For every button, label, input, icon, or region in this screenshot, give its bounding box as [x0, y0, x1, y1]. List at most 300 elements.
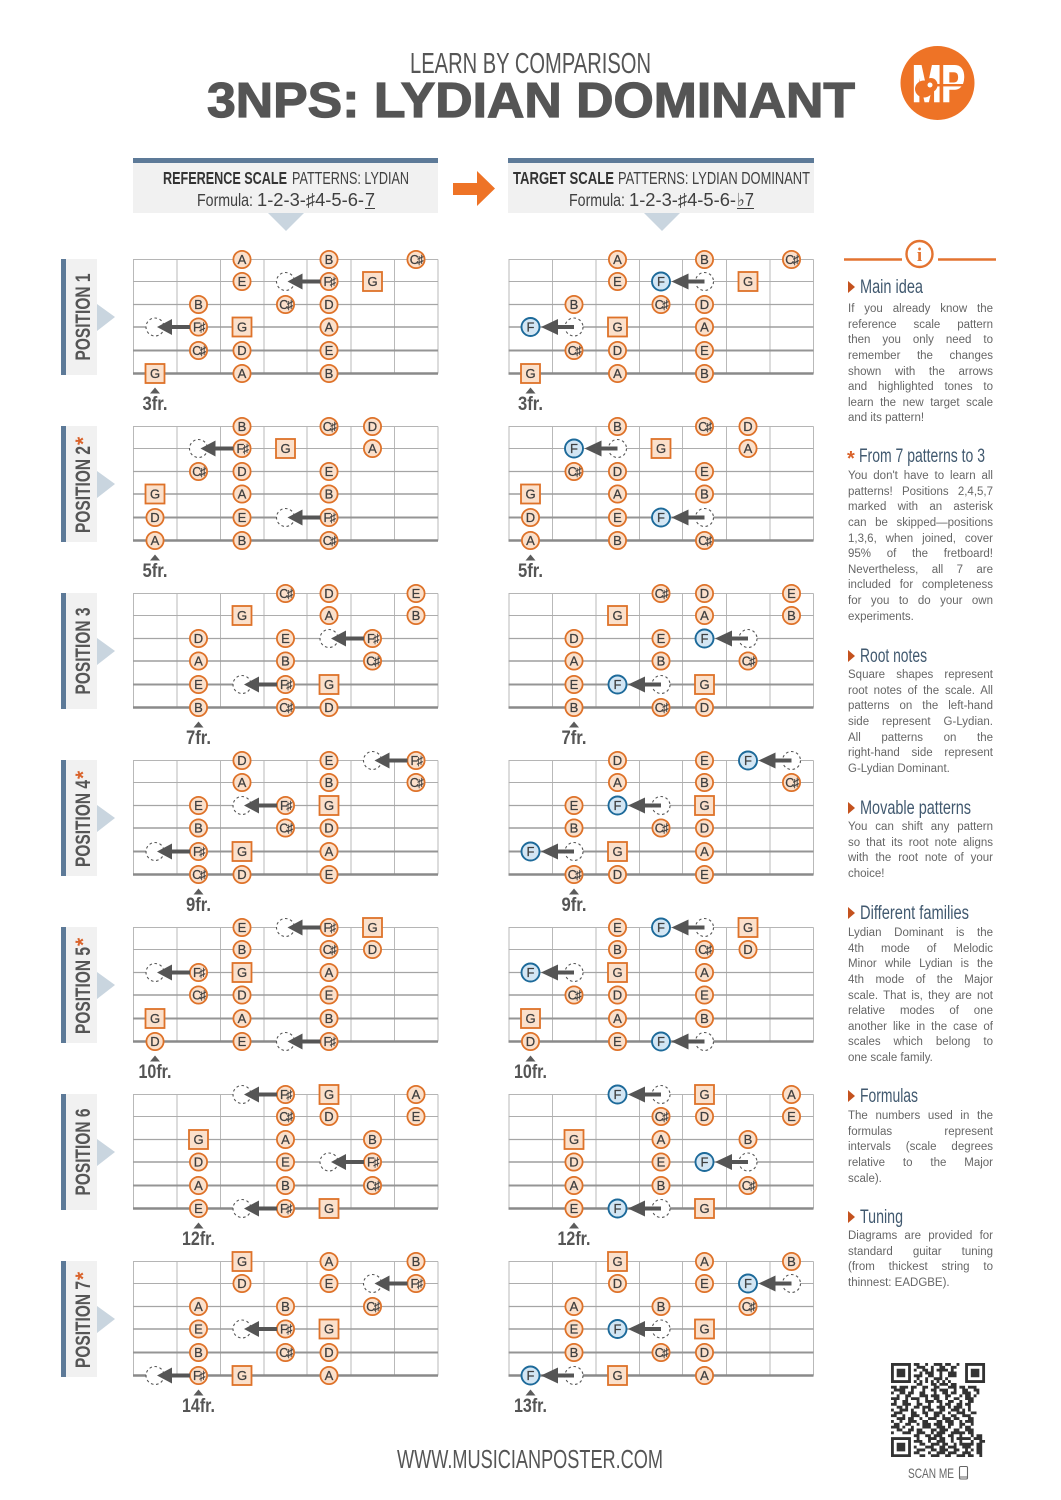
fretboard: position 7 target: C♯ — [655, 1346, 668, 1360]
text: tuning — [848, 1230, 993, 1289]
arrow: F sharp moves to F — [233, 1086, 277, 1104]
position label 7 — [61, 1261, 115, 1377]
fretboard: position 4 reference — [133, 752, 438, 916]
arrow: F sharp moves to F — [276, 272, 320, 290]
subtitle: learn by comparison: LEARN BY COMPARISON — [410, 48, 651, 80]
fretboard: position 5 target: G — [743, 920, 753, 935]
fretboard: position 1 target: B — [700, 252, 709, 267]
heading: movable patterns: Movable patterns — [860, 798, 971, 819]
scan me label with phone icon: SCAN ME — [908, 1465, 954, 1481]
icon: musician poster logo — [900, 46, 974, 120]
heading: formulas: Formulas — [860, 1086, 918, 1107]
fretboard: position 7 target: F — [614, 1322, 622, 1336]
position label 6 — [61, 1094, 115, 1210]
arrow: F sharp moves to F — [233, 796, 277, 814]
fretboard: position 5 reference — [133, 918, 438, 1083]
fretboard: position 5 target — [508, 918, 814, 1083]
fretboard: position 3 target: E — [657, 631, 666, 646]
fretboard: position 5 reference: E — [325, 988, 334, 1002]
fretboard: position 5 target: E — [700, 988, 709, 1002]
fretboard: position 5 reference: G — [150, 1011, 160, 1026]
arrow: F sharp moves to F — [320, 630, 364, 648]
fretboard: position 7 reference: B — [281, 1299, 290, 1314]
panel: target scale header — [508, 158, 814, 231]
fretboard: position 1 target: D — [613, 343, 622, 358]
arrow: F sharp moves to F — [541, 842, 583, 860]
fret marker: 14fr — [182, 1390, 215, 1417]
fretboard: position 5 target: E — [613, 1034, 622, 1049]
icon: info divider — [844, 241, 996, 267]
fretboard: position 2 reference: B — [238, 533, 246, 548]
position label 6: POSITION 6 — [72, 1108, 95, 1196]
text: from 7 patterns to 3: marked with an asterisk — [848, 501, 993, 513]
fretboard: position 1 reference: A — [238, 366, 247, 381]
fretboard: position 2 reference: C♯ — [192, 465, 206, 479]
fretboard: position 6 reference: C♯ — [366, 1179, 380, 1193]
panel: reference scale header: 1-2-3-♯4-5-6- — [257, 190, 364, 210]
fretboard: position 6 target: E — [657, 1154, 666, 1170]
fretboard: position 6 reference: G — [193, 1132, 204, 1147]
fretboard: position 6 target: C♯ — [742, 1179, 755, 1193]
fretboard: position 1 reference: C♯ — [192, 344, 206, 358]
arrow: F sharp moves to F — [320, 1153, 364, 1171]
fretboard: position 1 reference: E — [325, 343, 334, 358]
fretboard: position 2 reference: F♯ — [323, 511, 336, 525]
panel: target scale header: 1-2-3-♯4-5-6- — [629, 190, 736, 210]
position label 2: * — [72, 436, 95, 445]
fretboard: position 7 target: G — [699, 1322, 710, 1336]
fretboard: position 4 target: C♯ — [785, 776, 799, 790]
fretboard: position 1 target: G — [743, 274, 753, 289]
fretboard: position 6 reference: F♯ — [367, 1156, 379, 1170]
fretboard: position 6 reference: E — [281, 1154, 290, 1170]
fretboard: position 2 target: C♯ — [568, 465, 581, 479]
fretboard: position 5 target: F — [527, 965, 535, 980]
arrow: F sharp moves to F — [233, 1200, 277, 1218]
fretboard: position 2 reference: D — [237, 464, 247, 479]
text: from 7 patterns to 3: for you to do your own — [848, 595, 993, 607]
fretboard: position 4 reference: A — [325, 844, 334, 859]
fretboard: position 5 reference: D — [368, 942, 377, 957]
arrow: F sharp moves to F — [628, 796, 670, 814]
fretboard: position 1 target: C♯ — [568, 344, 581, 358]
fretboard: position 4 reference: D — [237, 867, 247, 882]
fret marker: 10fr — [514, 1056, 547, 1083]
title — [207, 48, 855, 128]
arrow: F sharp moves to F — [672, 508, 714, 526]
fretboard: position 1 target: F — [657, 274, 665, 289]
arrow: F sharp moves to F — [276, 918, 320, 936]
text: from 7 patterns to 3: patterns! Positions 2,4,5,7 — [848, 486, 993, 498]
arrow: F sharp moves to F — [628, 676, 670, 694]
fretboard: position 1 reference: G — [237, 320, 247, 334]
fretboard: position 5 reference: F♯ — [193, 966, 205, 980]
fretboard: position 1 reference: B — [325, 252, 333, 267]
fret marker: 13fr: 13fr. — [514, 1396, 547, 1417]
fretboard: position 2 reference: A — [151, 533, 160, 548]
fretboard: position 3 reference: D — [324, 700, 334, 715]
text: movable patterns: so that its root note aligns — [848, 837, 993, 849]
fret marker: 5fr: 5fr. — [142, 561, 168, 582]
fretboard: position 3 reference: C♯ — [279, 587, 293, 601]
fretboard: position 4 reference: C♯ — [192, 868, 206, 882]
fretboard: position 3 target: E — [570, 677, 579, 692]
text: different families: one scale family. — [848, 1052, 933, 1064]
arrow: F sharp moves to F — [146, 1366, 190, 1384]
fretboard: position 5 reference: D — [237, 988, 247, 1002]
arrow: F sharp moves to F — [672, 918, 714, 936]
arrow: F sharp moves to F — [233, 1320, 277, 1338]
fretboard: position 6 reference: F♯ — [280, 1088, 292, 1102]
QR code — [891, 1363, 985, 1457]
arrow: F sharp moves to F — [584, 440, 626, 458]
fretboard: position 2 reference: F♯ — [236, 442, 249, 456]
fretboard: position 7 target: E — [700, 1276, 709, 1291]
website footer: WWW.MUSICIANPOSTER.COM — [397, 1444, 663, 1474]
fretboard: position 6 reference: A — [281, 1132, 290, 1147]
fret marker: 7fr: 7fr. — [562, 728, 586, 749]
text: movable patterns: with the root note of your — [848, 852, 993, 864]
text: main idea: shown with the arrows — [848, 366, 993, 378]
icon: musician poster logo: MP — [912, 56, 965, 114]
fretboard: position 6 reference: B — [368, 1132, 377, 1147]
heading: main idea — [848, 277, 923, 298]
position label 3 — [61, 593, 115, 709]
fretboard: position 1 target: F — [527, 320, 535, 334]
panel: reference scale header: 7 — [365, 190, 375, 210]
text: different families: Minor while Lydian is the — [848, 958, 993, 970]
heading: from 7 patterns to 3: From 7 patterns to 3 — [859, 446, 985, 467]
arrow: reference to target — [453, 171, 495, 206]
fretboard: position 4 reference: A — [238, 775, 247, 790]
fretboard: position 5 reference: F♯ — [323, 921, 336, 935]
fretboard: position 1 reference: C♯ — [279, 298, 293, 312]
fretboard: position 2 target — [508, 418, 814, 582]
arrow: F sharp moves to F — [541, 318, 583, 336]
position label 7: * — [72, 1271, 95, 1280]
fretboard: position 4 reference: E — [194, 798, 203, 813]
arrow: F sharp moves to F — [758, 1274, 800, 1292]
fretboard: position 2 target: F — [657, 510, 665, 525]
position label 5: * — [72, 937, 95, 946]
fretboard: position 2 target: F — [570, 441, 578, 456]
fretboard: position 4 reference: C♯ — [410, 776, 423, 790]
fret marker: 9fr — [562, 888, 586, 916]
fretboard: position 7 reference: C♯ — [279, 1346, 293, 1360]
text: formulas: relative to the Major — [848, 1157, 993, 1169]
text: from 7 patterns to 3: experiments. — [848, 611, 914, 623]
fretboard: position 5 reference: E — [238, 920, 247, 935]
fretboard: position 5 reference: G — [367, 920, 378, 935]
fretboard: position 3 target: D — [700, 586, 709, 601]
fretboard: position 3 reference: A — [325, 608, 334, 623]
fret marker: 9fr — [186, 888, 211, 916]
fretboard: position 3 target: F — [614, 677, 622, 692]
fretboard: position 6 target: F — [614, 1087, 622, 1102]
position label 5 — [61, 927, 115, 1043]
text: tuning: thinnest: EADGBE). — [848, 1277, 950, 1289]
fretboard: position 7 reference: A — [194, 1299, 203, 1314]
fretboard: position 4 target: F — [614, 798, 622, 813]
text: main idea: and its pattern! — [848, 412, 924, 424]
fretboard: position 7 reference: E — [325, 1276, 334, 1291]
text: movable patterns: choice! — [848, 868, 884, 880]
fretboard: position 7 reference: G — [237, 1254, 247, 1269]
fretboard: position 1 target: G — [525, 366, 536, 381]
fretboard: position 3 reference: E — [412, 586, 421, 601]
fretboard: position 4 reference: F♯ — [193, 845, 205, 859]
fretboard: position 5 target: C♯ — [698, 943, 712, 957]
fretboard: position 3 reference: D — [324, 586, 334, 601]
arrow: F sharp moves to F — [146, 318, 190, 336]
fret marker: 5fr — [142, 554, 168, 582]
fretboard: position 6 target: C♯ — [655, 1110, 668, 1124]
fretboard: position 2 reference — [133, 418, 438, 582]
arrow: F sharp moves to F — [276, 1032, 320, 1050]
fretboard: position 1 target: B — [700, 366, 709, 381]
fretboard: position 2 reference: D — [150, 510, 160, 525]
fretboard: position 6 target — [508, 1085, 814, 1250]
fretboard: position 5 target: D — [613, 988, 622, 1002]
fretboard: position 4 target: A — [613, 775, 622, 790]
fretboard: position 6 reference: G — [324, 1087, 334, 1102]
fretboard: position 2 target: A — [744, 441, 753, 456]
fretboard: position 5 reference: B — [325, 1011, 333, 1026]
fret marker: 12fr — [558, 1222, 590, 1250]
fretboard: position 5 target: A — [700, 965, 709, 980]
text: different families: scales which belong to — [848, 1036, 993, 1048]
icon: info divider: i — [917, 245, 922, 266]
fretboard: position 5 target: G — [612, 965, 623, 980]
fretboard: position 4 reference: F♯ — [280, 799, 292, 813]
text: root notes: G-Lydian Dominant. — [848, 763, 950, 775]
fretboard: position 3 reference: E — [281, 631, 290, 646]
fretboard: position 3 reference: B — [281, 654, 290, 668]
fretboard: position 2 reference: B — [325, 486, 333, 502]
fret marker: 12fr: 12fr. — [182, 1229, 215, 1250]
panel: target scale header: TARGET SCALE — [513, 168, 614, 188]
text: from 7 patterns to 3: Nevertheless, all 7 are — [848, 564, 993, 576]
arrow: F sharp moves to F — [628, 1320, 670, 1338]
panel: target scale header: PATTERNS: LYDIAN DOMINANT — [618, 168, 810, 188]
fretboard: position 6 target: F — [614, 1201, 622, 1216]
fretboard: position 6 target: G — [569, 1132, 579, 1147]
text: root notes — [848, 669, 993, 775]
fretboard: position 4 reference: C♯ — [279, 822, 293, 836]
fret marker: 3fr — [142, 388, 168, 415]
fretboard: position 6 target: B — [657, 1178, 665, 1193]
text: different families: 4th mode of the Major — [848, 974, 993, 986]
text: root notes: Square shapes represent — [848, 669, 993, 681]
fretboard: position 4 target: G — [699, 798, 710, 813]
fretboard: position 7 target: F — [744, 1276, 752, 1291]
arrow: F sharp moves to F — [628, 1086, 670, 1104]
fretboard: position 7 reference: D — [237, 1276, 247, 1291]
fretboard: position 3 target: D — [569, 631, 579, 646]
text: movable patterns: You can shift any pattern — [848, 821, 993, 833]
heading: different families: Different families — [860, 903, 969, 924]
arrow: F sharp moves to F — [364, 1274, 408, 1292]
fret marker: 9fr: 9fr. — [562, 895, 586, 916]
arrow: F sharp moves to F — [276, 508, 320, 526]
fret marker: 5fr: 5fr. — [518, 561, 543, 582]
arrow: F sharp moves to F — [146, 842, 190, 860]
fretboard: position 7 target: A — [700, 1254, 709, 1269]
fretboard: position 3 reference: G — [324, 677, 334, 692]
fretboard: position 6 target: E — [787, 1109, 796, 1124]
fretboard: position 1 target: D — [700, 297, 709, 312]
fret marker: 3fr: 3fr. — [518, 394, 543, 415]
fretboard: position 5 target: F — [657, 1034, 665, 1049]
fretboard: position 7 target: G — [612, 1368, 623, 1383]
fretboard: position 3 target: C♯ — [742, 654, 755, 668]
position label 7: POSITION 7 — [72, 1281, 95, 1368]
fretboard: position 7 target: A — [570, 1299, 579, 1314]
fretboard: position 4 reference: B — [194, 820, 203, 836]
position label 4: POSITION 4 — [72, 780, 95, 867]
fretboard: position 5 reference: A — [325, 965, 334, 980]
fretboard: position 4 reference: G — [324, 798, 334, 813]
heading: tuning: Tuning — [860, 1207, 903, 1228]
fretboard: position 5 target: A — [613, 1011, 622, 1026]
text: from 7 patterns to 3: 95% of the fretboard! — [848, 548, 993, 560]
fretboard: position 6 target: G — [699, 1201, 710, 1216]
fretboard: position 5 target: D — [526, 1034, 535, 1049]
text: different families: Lydian Dominant is the — [848, 927, 993, 939]
fretboard: position 5 reference: D — [150, 1034, 160, 1049]
fretboard: position 4 target — [508, 752, 814, 916]
fretboard: position 4 target: D — [700, 820, 709, 836]
fretboard: position 2 reference: D — [368, 419, 377, 434]
fretboard: position 7 reference: F♯ — [410, 1277, 423, 1291]
fret marker: 10fr: 10fr. — [138, 1062, 172, 1083]
position label 1: POSITION 1 — [72, 273, 95, 360]
fretboard: position 7 target: D — [613, 1276, 622, 1291]
fretboard: position 6 reference: B — [281, 1178, 290, 1193]
fretboard: position 6 target: G — [699, 1087, 710, 1102]
fretboard: position 3 reference: F♯ — [280, 678, 292, 692]
fretboard: position 7 reference: G — [324, 1322, 334, 1336]
text: from 7 patterns to 3: 1,3,6, when joined, cover — [848, 533, 993, 545]
fretboard: position 1 target: B — [570, 297, 578, 312]
arrow: F sharp moves to F — [364, 752, 408, 770]
text: main idea: learn the new target scale — [848, 397, 993, 409]
fretboard: position 7 reference: G — [237, 1368, 247, 1383]
fretboard: position 1 reference: B — [325, 366, 333, 381]
main title: 3NPS: LYDIAN DOMINANT — [207, 74, 855, 128]
fretboard: position 3 target: E — [787, 586, 796, 601]
fretboard: position 7 reference: E — [194, 1322, 203, 1336]
fretboard: position 5 target: D — [743, 942, 753, 957]
fret marker: 12fr: 12fr. — [558, 1229, 590, 1250]
fretboard: position 4 target: D — [613, 753, 622, 768]
fretboard: position 1 target: E — [700, 343, 709, 358]
fretboard: position 3 target: B — [570, 700, 578, 715]
fretboard: position 5 reference: C♯ — [323, 943, 336, 957]
fretboard: position 4 reference: G — [237, 844, 247, 859]
arrow: F sharp moves to F — [715, 1153, 757, 1171]
fretboard: position 4 target: B — [700, 775, 709, 790]
fretboard: position 7 target: G — [612, 1254, 623, 1269]
fretboard: position 2 target: E — [700, 464, 709, 479]
fretboard: position 4 target: B — [570, 820, 578, 836]
fretboard: position 2 reference: C♯ — [323, 534, 336, 548]
fretboard: position 7 target: F — [527, 1368, 535, 1383]
fretboard: position 3 reference: C♯ — [279, 701, 293, 715]
fretboard: position 3 target: D — [700, 700, 709, 715]
fretboard: position 3 reference — [133, 585, 438, 749]
panel: target scale header: Formula: — [569, 190, 625, 210]
text: different families: another like in the case of — [848, 1021, 993, 1033]
text: root notes: root notes of the scale. All — [848, 685, 993, 697]
fretboard: position 7 target: C♯ — [742, 1300, 755, 1314]
fretboard: position 1 target: C♯ — [655, 298, 668, 312]
heading: root notes: Root notes — [860, 646, 927, 667]
fretboard: position 7 reference: F♯ — [280, 1322, 292, 1336]
fretboard: position 5 target: G — [525, 1011, 536, 1026]
fret marker: 9fr: 9fr. — [186, 895, 211, 916]
text: main idea: and highlighted tones to — [848, 381, 993, 393]
fretboard: position 2 reference: E — [238, 510, 247, 525]
position label 1 — [61, 259, 115, 375]
fretboard: position 4 target: F — [527, 844, 535, 859]
heading: from 7 patterns to 3 — [847, 446, 985, 470]
fret marker: 10fr: 10fr. — [514, 1062, 547, 1083]
panel: target scale header: ♭7 — [737, 190, 754, 210]
fretboard: position 5 target: E — [613, 920, 622, 935]
fretboard: position 7 target: B — [787, 1254, 796, 1269]
fretboard: position 2 reference: B — [238, 419, 246, 434]
fret marker: 3fr: 3fr. — [142, 394, 168, 415]
fretboard: position 7 reference: A — [325, 1368, 334, 1383]
text: different families — [848, 927, 993, 1064]
fretboard: position 6 reference: G — [324, 1201, 334, 1216]
text: formulas: The numbers used in the — [848, 1110, 993, 1122]
text: different families: 4th mode of Melodic — [848, 943, 993, 955]
fretboard: position 6 reference: A — [194, 1178, 203, 1193]
fretboard: position 7 reference: A — [325, 1254, 334, 1269]
fretboard: position 2 target: D — [613, 464, 622, 479]
text: from 7 patterns to 3 — [848, 470, 993, 623]
fretboard: position 3 reference: G — [237, 608, 247, 623]
fret marker: 7fr: 7fr. — [186, 728, 211, 749]
fretboard: position 3 reference: A — [194, 654, 203, 668]
panel: reference scale header — [133, 158, 438, 231]
text: from 7 patterns to 3: You don't have to learn all — [848, 470, 993, 482]
heading: formulas — [848, 1086, 918, 1107]
arrow: F sharp moves to F — [146, 964, 190, 982]
fretboard: position 5 reference: F♯ — [323, 1035, 336, 1049]
text: main idea — [848, 303, 993, 424]
position label 4: * — [72, 770, 95, 779]
fretboard: position 6 target: B — [744, 1132, 752, 1147]
fretboard: position 4 reference: E — [325, 867, 334, 882]
fretboard: position 2 target: B — [700, 486, 709, 502]
fretboard: position 2 target: G — [656, 441, 666, 456]
fretboard: position 5 target: F — [657, 920, 665, 935]
fretboard: position 6 reference: E — [412, 1109, 421, 1124]
text: tuning: Diagrams are provided for — [848, 1230, 993, 1242]
fretboard: position 1 reference — [133, 251, 438, 415]
position label 2: POSITION 2 — [72, 446, 95, 533]
arrow: F sharp moves to F — [758, 752, 800, 770]
fretboard: position 2 target: E — [613, 510, 622, 525]
text: main idea: remember the changes — [848, 350, 993, 362]
fretboard: position 7 target: D — [700, 1345, 709, 1360]
fretboard: position 6 target: F — [701, 1154, 709, 1170]
text: tuning: (from thickest string to — [848, 1261, 993, 1273]
fretboard: position 2 reference: A — [238, 486, 247, 502]
